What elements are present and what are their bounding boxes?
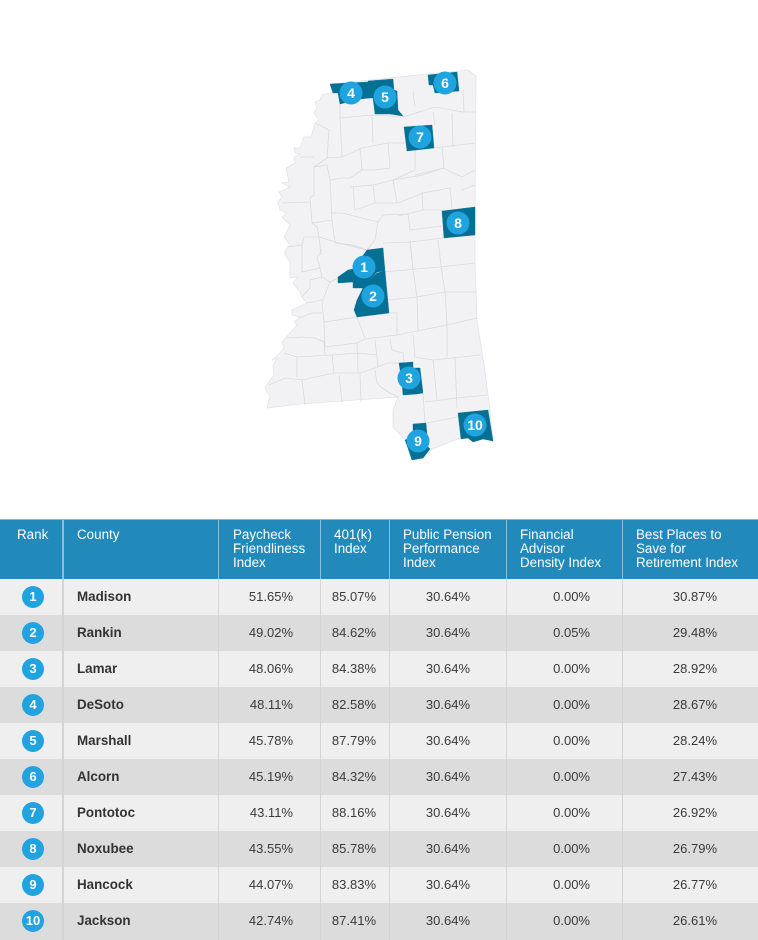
rank badge 6: 6 xyxy=(29,769,37,784)
marker 1: 1 xyxy=(360,259,368,275)
row 5: Marshall: 45.78% xyxy=(249,733,293,748)
row 8: Noxubee: 26.79% xyxy=(673,841,717,856)
rank badge 2 xyxy=(22,622,44,644)
marker 5 xyxy=(374,86,396,108)
table header xyxy=(0,519,758,579)
header: Financial Advisor Density Index: Advisor xyxy=(520,541,565,556)
row 1: Madison xyxy=(0,579,758,615)
row 6: Alcorn: 30.64% xyxy=(426,769,470,784)
row 7: Pontotoc xyxy=(0,795,758,831)
row 4: DeSoto: 82.58% xyxy=(332,697,376,712)
rank badge 1: 1 xyxy=(29,589,37,604)
rank badge 4: 4 xyxy=(29,697,37,712)
row 9: Hancock: 30.64% xyxy=(426,877,470,892)
header: Public Pension Performance Index: Public Pension xyxy=(403,527,492,542)
row 6: Alcorn: 84.32% xyxy=(332,769,376,784)
row 6: Alcorn: 27.43% xyxy=(673,769,717,784)
row 2: Rankin: 30.64% xyxy=(426,625,470,640)
row 6: Alcorn: Alcorn xyxy=(77,769,119,784)
county: Jackson xyxy=(458,410,493,442)
row 2: Rankin: 49.02% xyxy=(249,625,293,640)
row 8: Noxubee: 0.00% xyxy=(553,841,590,856)
row 1: Madison: 51.65% xyxy=(249,589,293,604)
row 1: Madison: 0.00% xyxy=(553,589,590,604)
row 5: Marshall: 0.00% xyxy=(553,733,590,748)
header: Financial Advisor Density Index xyxy=(520,527,601,570)
row 2: Rankin: 84.62% xyxy=(332,625,376,640)
rank badge 10: 10 xyxy=(26,913,40,928)
rank badge 7 xyxy=(22,802,44,824)
county: Hancock xyxy=(405,423,430,460)
row 5: Marshall: Marshall xyxy=(77,733,131,748)
county boundaries xyxy=(269,90,487,423)
row 9: Hancock: 44.07% xyxy=(249,877,293,892)
county: Lamar xyxy=(399,362,423,395)
marker 3: 3 xyxy=(405,370,413,386)
county: Noxubee xyxy=(442,207,475,238)
row 7: Pontotoc: 30.64% xyxy=(426,805,470,820)
rank badge 1 xyxy=(22,586,44,608)
header: Public Pension Performance Index: Index xyxy=(403,555,436,570)
row 2: Rankin: 29.48% xyxy=(673,625,717,640)
marker 4: 4 xyxy=(347,85,355,101)
header: 401(k) Index: Index xyxy=(334,541,367,556)
row 3: Lamar: 48.06% xyxy=(249,661,293,676)
marker 9: 9 xyxy=(414,433,422,449)
row 3: Lamar xyxy=(0,651,758,687)
marker 7: 7 xyxy=(416,129,424,145)
row 6: Alcorn: 0.00% xyxy=(553,769,590,784)
row 9: Hancock: 0.00% xyxy=(553,877,590,892)
rank badge 9 xyxy=(22,874,44,896)
row 6: Alcorn xyxy=(0,759,758,795)
county: DeSoto xyxy=(330,82,370,104)
row 5: Marshall: 30.64% xyxy=(426,733,470,748)
row 5: Marshall: 87.79% xyxy=(332,733,376,748)
rank badge 8: 8 xyxy=(29,841,37,856)
header: Best Places to Save for Retirement Index: Retirement Index xyxy=(636,555,738,570)
row 8: Noxubee: 43.55% xyxy=(249,841,293,856)
rank badge 5 xyxy=(22,730,44,752)
row 3: Lamar: 0.00% xyxy=(553,661,590,676)
row 3: Lamar: 84.38% xyxy=(332,661,376,676)
rank badge 6 xyxy=(22,766,44,788)
marker 9 xyxy=(406,430,430,452)
row 7: Pontotoc: 43.11% xyxy=(250,805,293,820)
header: Best Places to Save for Retirement Index: Best Places to xyxy=(636,527,722,542)
row 7: Pontotoc: 26.92% xyxy=(673,805,717,820)
row 4: DeSoto: 30.64% xyxy=(426,697,470,712)
row 1: Madison: 85.07% xyxy=(332,589,376,604)
row 10: Jackson: 0.00% xyxy=(553,913,590,928)
header: Paycheck Friendliness Index: Paycheck xyxy=(233,527,291,542)
row 8: Noxubee: 30.64% xyxy=(426,841,470,856)
marker 3 xyxy=(398,366,420,390)
header: County: County xyxy=(77,527,119,542)
county: Marshall xyxy=(368,79,403,116)
county: Pontotoc xyxy=(404,125,434,151)
header: Paycheck Friendliness Index xyxy=(233,527,305,570)
row 5: Marshall: 28.24% xyxy=(673,733,717,748)
marker 4 xyxy=(340,82,362,104)
row 10: Jackson: 87.41% xyxy=(332,913,376,928)
marker 2 xyxy=(362,284,384,308)
row 10: Jackson: 26.61% xyxy=(673,913,717,928)
map of Mississippi counties xyxy=(264,70,494,460)
marker 7 xyxy=(408,126,432,148)
marker 10: 10 xyxy=(467,417,483,433)
marker 1 xyxy=(352,256,376,278)
row 1: Madison: 30.87% xyxy=(673,589,717,604)
header: Financial Advisor Density Index: Density Index xyxy=(520,555,601,570)
rank badge 8 xyxy=(22,838,44,860)
rank badge 9: 9 xyxy=(29,877,37,892)
header: Paycheck Friendliness Index: Index xyxy=(233,555,266,570)
county: Rankin xyxy=(354,271,389,317)
highlighted top ten counties xyxy=(330,72,493,460)
row 4: DeSoto xyxy=(0,687,758,723)
row 4: DeSoto: DeSoto xyxy=(77,697,124,712)
row 10: Jackson: Jackson xyxy=(77,913,131,928)
row 4: DeSoto: 48.11% xyxy=(250,697,293,712)
row 10: Jackson: 30.64% xyxy=(426,913,470,928)
row 4: DeSoto: 28.67% xyxy=(673,697,717,712)
row 3: Lamar: 30.64% xyxy=(426,661,470,676)
rank badge 7: 7 xyxy=(29,805,37,820)
header: Financial Advisor Density Index: Financial xyxy=(520,527,574,542)
header: Public Pension Performance Index: Performance xyxy=(403,541,480,556)
marker 8: 8 xyxy=(454,215,462,231)
county: Madison xyxy=(338,248,385,288)
marker 2: 2 xyxy=(369,288,377,304)
county: Alcorn xyxy=(428,72,459,93)
row 1: Madison: 30.64% xyxy=(426,589,470,604)
row 9: Hancock: 26.77% xyxy=(673,877,717,892)
row 2: Rankin xyxy=(0,615,758,651)
row 8: Noxubee xyxy=(0,831,758,867)
state outline xyxy=(265,70,493,460)
row 3: Lamar: 28.92% xyxy=(673,661,717,676)
rank badge 3 xyxy=(22,658,44,680)
header: 401(k) Index: 401(k) xyxy=(334,527,372,542)
marker 6 xyxy=(434,72,456,94)
marker 5: 5 xyxy=(381,89,389,105)
row 8: Noxubee: Noxubee xyxy=(77,841,134,856)
marker 6: 6 xyxy=(441,75,449,91)
row 9: Hancock xyxy=(0,867,758,903)
row 7: Pontotoc: 0.00% xyxy=(553,805,590,820)
rank badge 4 xyxy=(22,694,44,716)
row 1: Madison: Madison xyxy=(77,589,131,604)
row 9: Hancock: 83.83% xyxy=(332,877,376,892)
row 3: Lamar: Lamar xyxy=(77,661,117,676)
header: 401(k) Index xyxy=(334,527,372,556)
rank badge 10 xyxy=(22,910,44,932)
marker 10 xyxy=(464,414,486,436)
row 9: Hancock: Hancock xyxy=(77,877,133,892)
header: Public Pension Performance Index xyxy=(403,527,492,570)
header: Rank: Rank xyxy=(17,527,48,542)
rank badge 3: 3 xyxy=(29,661,37,676)
row 8: Noxubee: 85.78% xyxy=(332,841,376,856)
rank badge 5: 5 xyxy=(29,733,37,748)
header: Paycheck Friendliness Index: Friendliness xyxy=(233,541,305,556)
row 6: Alcorn: 45.19% xyxy=(249,769,293,784)
row 10: Jackson: 42.74% xyxy=(249,913,293,928)
row 7: Pontotoc: Pontotoc xyxy=(77,805,135,820)
row 2: Rankin: 0.05% xyxy=(553,625,590,640)
row 4: DeSoto: 0.00% xyxy=(553,697,590,712)
marker 8 xyxy=(446,212,470,234)
row 5: Marshall xyxy=(0,723,758,759)
row 7: Pontotoc: 88.16% xyxy=(332,805,376,820)
row 10: Jackson xyxy=(0,903,758,940)
row 2: Rankin: Rankin xyxy=(77,625,122,640)
rank badge 2: 2 xyxy=(29,625,37,640)
header: Best Places to Save for Retirement Index xyxy=(636,527,738,570)
header: Best Places to Save for Retirement Index: Save for xyxy=(636,541,686,556)
